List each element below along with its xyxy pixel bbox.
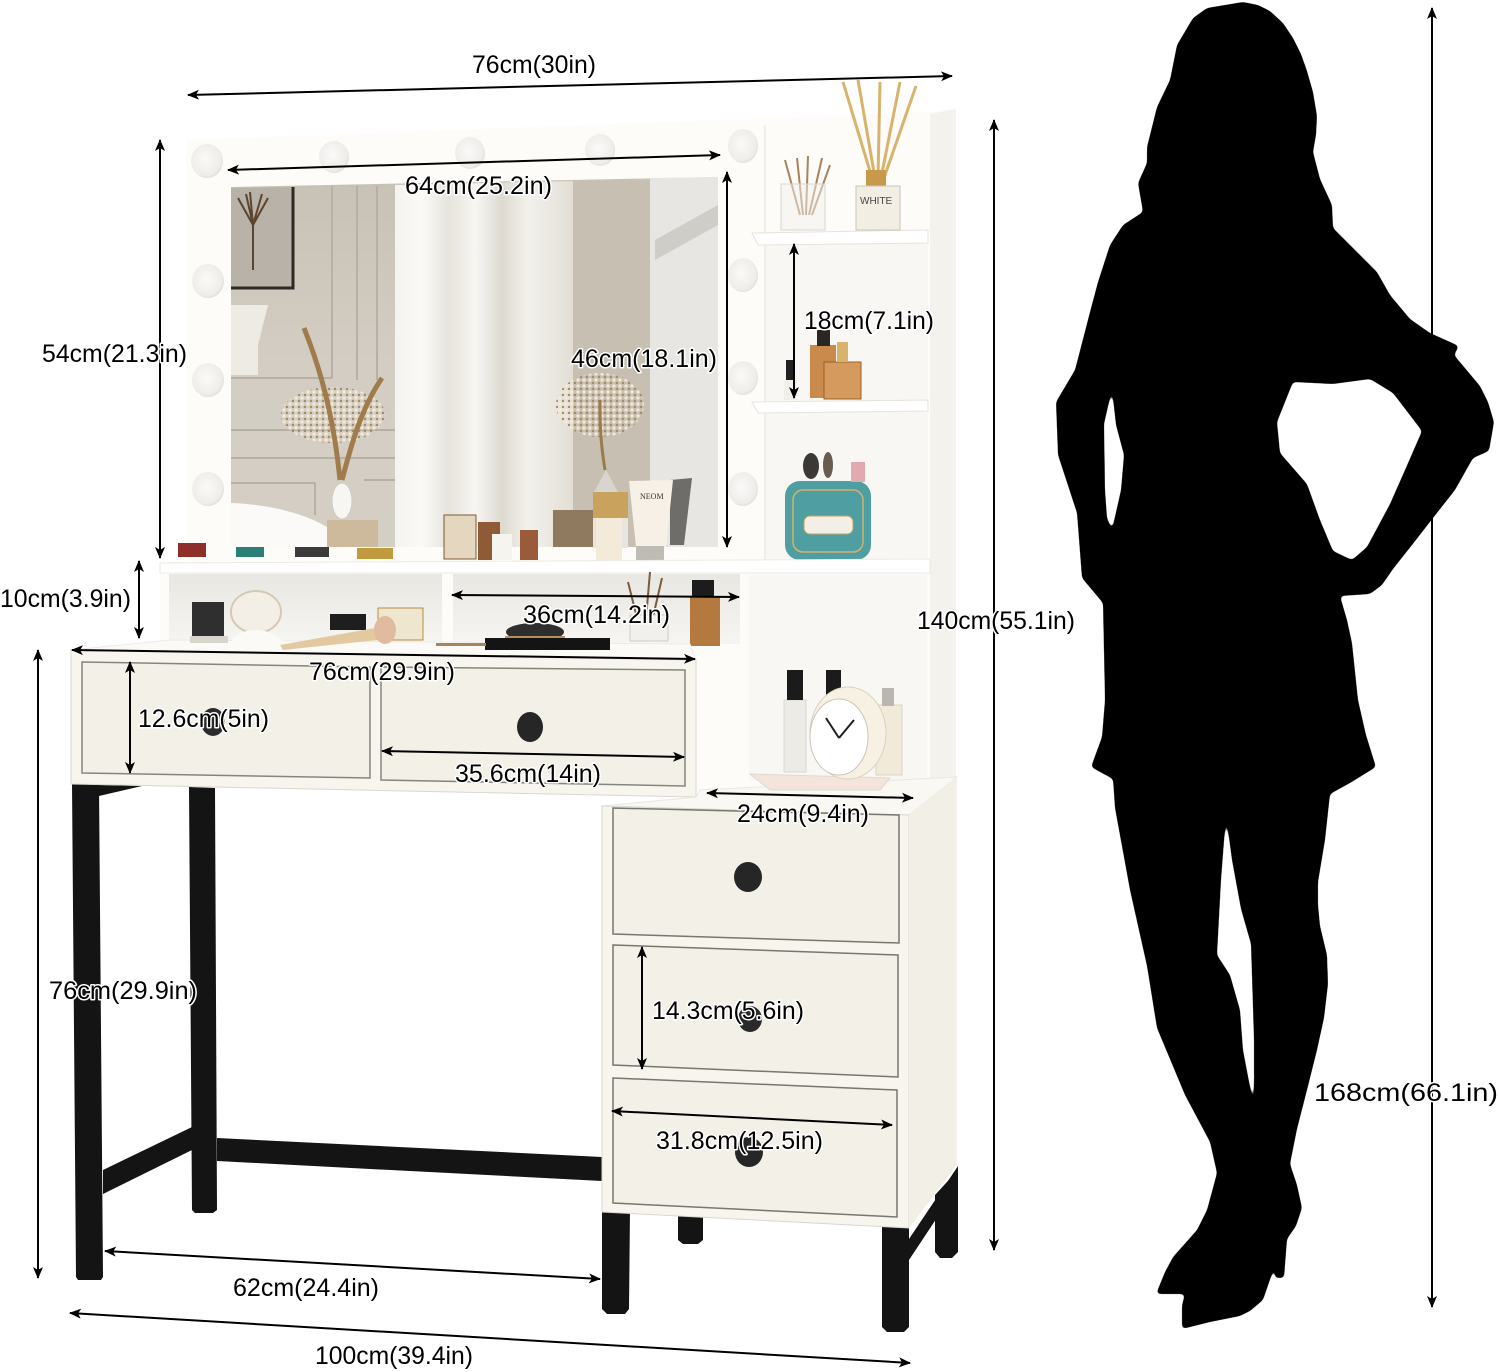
dimension: cabinet drawer width 31.8cm: 31.8cm(12.5in) [656,1127,823,1155]
dimension: cabinet drawer width 31.8cm [612,1111,892,1155]
column divider [764,125,766,560]
right knob [517,712,543,742]
reed diffuser: WHITE [860,196,893,207]
middle cubby bottle and brushes [628,572,720,646]
reed diffuser [843,80,916,230]
woman silhouette [1056,2,1494,1329]
open right compartment [749,575,927,781]
dimension: desk height 76cm: 76cm(29.9in) [49,977,197,1005]
desktop top surface [71,640,696,660]
dimension: shelf height 18cm: 18cm(7.1in) [804,307,934,335]
middle cubby [453,574,740,644]
bottom drawer [613,1078,897,1217]
right drawer [381,667,685,786]
diagonal stair shadow [655,205,718,260]
lower shelf [752,400,928,413]
dimension: overall top width 76cm: 76cm(30in) [472,51,596,79]
bottom knob [735,1137,763,1167]
middle knob [738,1006,762,1032]
dimension: desktop width 76cm [72,650,695,686]
cotton swab cup [781,156,830,230]
NEOM tube: NEOM [640,492,664,501]
hutch back panel [160,109,956,790]
dimension: drawer height 14.3cm: 14.3cm(5.6in) [652,997,804,1025]
wall mouldings [231,186,395,515]
drawer unit front [71,650,696,797]
dimension: hutch mirror height 54cm: 54cm(21.3in) [42,340,187,368]
perfume bottles [784,330,861,400]
desktop [71,640,696,797]
clock and bottles [750,670,902,790]
top drawer [613,808,899,943]
mirror glass [231,177,718,547]
stump table [327,520,378,547]
cabinet side [909,777,957,1228]
dimension: cubby height 10cm: 10cm(3.9in) [0,585,131,613]
top knob [734,862,762,892]
curtain [395,181,573,547]
right cabinet [602,777,957,1228]
left cubby [169,574,442,642]
lower shelf board [160,559,930,573]
dimension: drawer width 35.6cm [382,751,684,788]
window reflection on wall [231,305,268,375]
picture tree [238,192,268,270]
cabinet front [602,806,909,1228]
dimension: drawer width 35.6cm: 35.6cm(14in) [455,760,601,788]
dimension: open compartment width 24cm [707,793,913,828]
middle drawer [613,945,898,1077]
dimension: mirror frame width 64cm: 64cm(25.2in) [405,172,552,200]
dimension: knee space 62cm: 62cm(24.4in) [233,1274,379,1302]
teal tissue box [785,452,871,568]
left drawer [82,662,370,778]
mirror [231,177,718,548]
dimension: total width 100cm: 100cm(39.4in) [315,1342,473,1370]
white vase [332,483,352,519]
framed picture [231,187,293,288]
table legs and frame [72,784,958,1332]
dimension: open compartment width 24cm: 24cm(9.4in) [737,800,869,828]
dimension: desktop width 76cm: 76cm(29.9in) [309,658,455,686]
window light [650,177,718,547]
gold vase [593,470,628,548]
vanity desk illustration [71,80,958,1332]
dimension: total width 100cm [70,1313,910,1370]
picture frame edge [231,187,293,288]
NEOM tube [629,480,673,547]
left cubby items [190,591,423,650]
left dried plant [281,328,385,480]
grey box [670,478,692,545]
cabinet top [602,777,957,815]
dimension: drawer height 12.6cm: 12.6cm(5in) [138,705,269,733]
dimension: mirror height 46cm: 46cm(18.1in) [571,345,717,373]
bed [231,503,350,547]
dimension: knee space 62cm [105,1251,600,1302]
hairbrush and mascara [436,623,610,650]
right wall dark band [573,181,650,547]
dimension: cubby width 36cm: 36cm(14.2in) [523,601,670,629]
dimension: hutch total height 140cm: 140cm(55.1in) [917,607,1075,635]
upper shelf [752,230,928,245]
dimension: drawer height 12.6cm [130,662,269,773]
round side table [553,510,593,547]
left knob [201,708,225,736]
right dried plant [556,373,644,470]
dimension: mirror frame width 64cm [228,155,720,200]
dimension: cubby height 10cm [0,561,139,638]
small cosmetics on shelf [178,515,664,564]
shelf column interior [766,242,928,560]
bulbs [191,129,758,506]
dimension: overall top width 76cm [188,51,952,95]
hutch right side panel [930,109,956,790]
dimension: person height 168cm: 168cm(66.1in) [1314,1079,1498,1107]
right shelf column [752,125,928,560]
